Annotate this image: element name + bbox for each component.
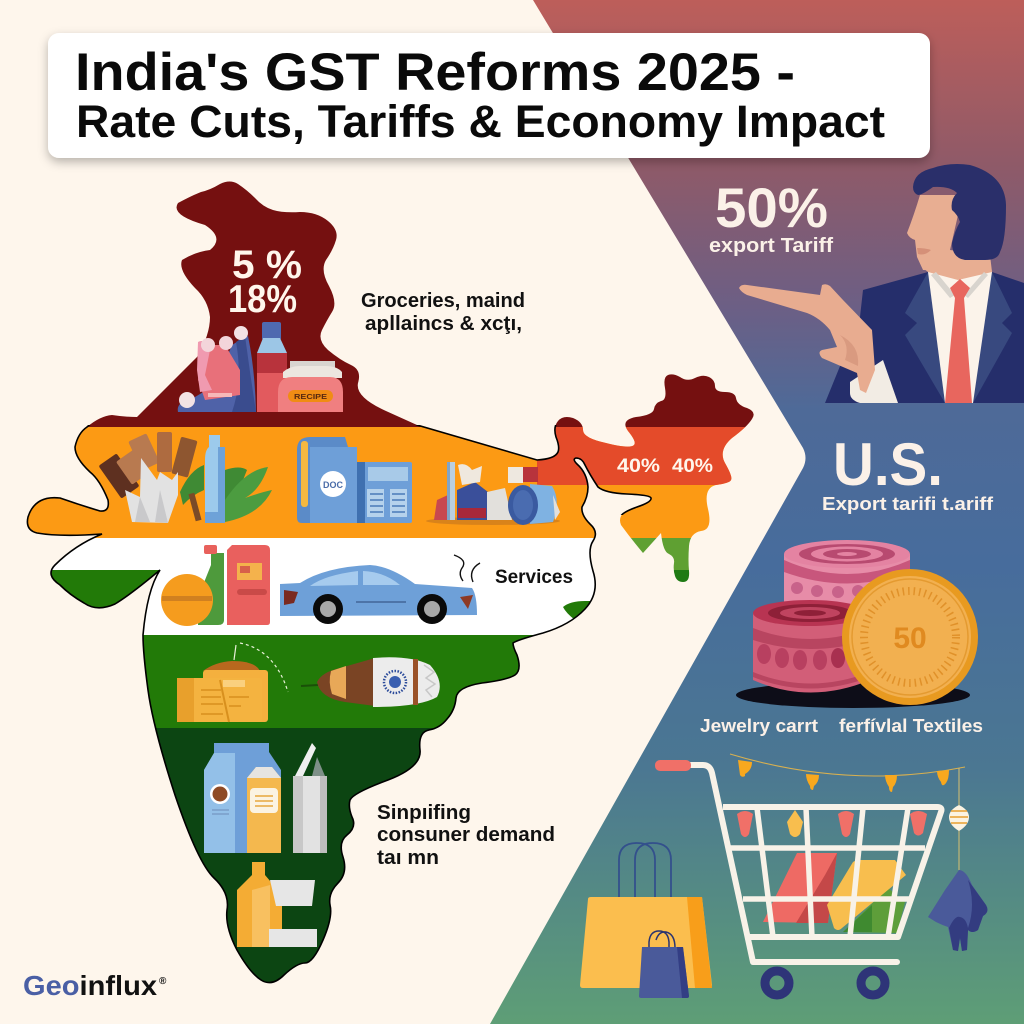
icon: jar: RECIPE <box>294 394 327 401</box>
rate labels 5% and 18% <box>228 243 302 321</box>
icon: water bottle and green leaves <box>180 435 272 523</box>
illustration: businessman pointing <box>739 164 1024 403</box>
gold coin <box>842 569 978 705</box>
cart contents <box>763 853 906 933</box>
caption: groceries: Groceries, maind <box>361 290 525 312</box>
title line 2: Rate Cuts, Tariffs & Economy Impact <box>76 96 885 147</box>
illustration: festive bunting <box>730 754 965 792</box>
north-east rate label 40% 40% <box>617 456 713 477</box>
icon: orange pill and green bottle <box>161 545 224 626</box>
registered mark: ® <box>159 976 167 987</box>
rate labels 5% and 18%: 5 % <box>232 243 302 287</box>
icon: grey carton <box>293 743 327 853</box>
icon: blue canister and leaflet: DOC <box>323 480 344 490</box>
logo: Geoinflux: Geoinflux <box>23 970 157 1001</box>
icon: spice sack with chakra <box>301 657 440 707</box>
icon: jar <box>278 361 343 412</box>
caption: consumer demand: Sinpıifing <box>377 802 471 824</box>
captions: jewelry and textiles <box>700 716 983 736</box>
icon: blue car <box>280 565 477 624</box>
icon: exhaust squiggles <box>454 555 480 582</box>
stat: U.S. export tariff: U.S. <box>833 431 943 498</box>
right gradient panel <box>490 0 1024 1024</box>
icon: red carton <box>227 545 270 625</box>
north-east rate label 40% 40%: 40% <box>672 456 713 477</box>
caption: consumer demand <box>377 802 555 869</box>
pointing hand <box>739 284 875 393</box>
lower textile roll <box>753 600 870 692</box>
stat: U.S. export tariff: Export tarifi t.ariff <box>822 494 994 514</box>
illustration: hanging ornament and cloth <box>928 768 987 951</box>
icon: yellow folder with spice pile <box>177 643 288 722</box>
title line 1: India's GST Reforms 2025 - <box>75 43 795 102</box>
stat: U.S. export tariff <box>822 431 994 514</box>
illustration: shopping bags <box>580 843 712 998</box>
caption: consumer demand: taı mn <box>377 847 439 869</box>
title card <box>48 33 930 158</box>
icon: groceries group in dark red band <box>178 322 343 412</box>
caption: services: Services <box>495 567 573 588</box>
icon: orange bottle and white tubs <box>237 862 317 947</box>
icon: chocolate bars and white leaves <box>99 432 198 523</box>
north-east rate label 40% 40%: 40% <box>617 456 660 477</box>
gold coin: 50 <box>893 622 927 655</box>
upper textile roll <box>784 540 910 610</box>
icon: blue canister and leaflet <box>297 437 412 523</box>
cart lanterns <box>737 810 927 837</box>
illustration: shopping cart <box>655 760 942 995</box>
captions: jewelry and textiles: ferfívlal Textiles <box>839 716 983 736</box>
icon: blue and yellow milk cartons <box>204 743 281 853</box>
stat: 50% export tariff: 50% <box>715 176 828 239</box>
illustration: textile rolls and gold coin <box>736 540 978 708</box>
cuff <box>850 360 898 403</box>
India map with tax-rate bands <box>26 182 754 984</box>
icon: bottle <box>257 322 287 412</box>
caption: consumer demand: consuner demand <box>377 824 555 846</box>
captions: jewelry and textiles: Jewelry carrt <box>700 716 818 736</box>
icon: household goods pile <box>426 462 560 525</box>
rate labels 5% and 18%: 18% <box>228 278 297 321</box>
caption: groceries <box>361 290 525 335</box>
stat: 50% export tariff: export Tariff <box>709 235 833 257</box>
caption: groceries: apllaincs & xcţı, <box>365 313 522 335</box>
